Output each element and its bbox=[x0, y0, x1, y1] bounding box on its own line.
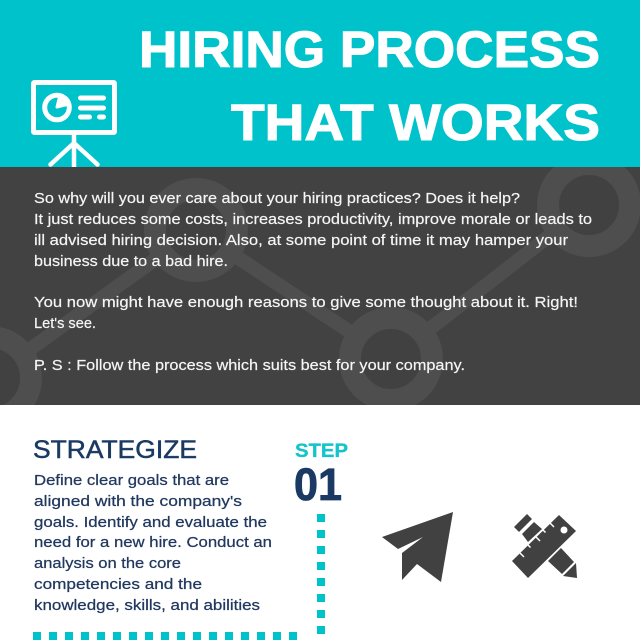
icon: ruler and pencil bbox=[512, 514, 577, 578]
strategize description: goals. Identify and evaluate the bbox=[34, 514, 267, 531]
dotted horizontal connector bbox=[33, 632, 297, 640]
panel: introduction bbox=[0, 164, 640, 419]
introduction text: So why will you ever care about your hiring practices? Does it help? bbox=[34, 190, 520, 207]
title bbox=[139, 21, 600, 151]
introduction text: Let's see. bbox=[34, 315, 96, 332]
strategize description: aligned with the company's bbox=[34, 493, 242, 510]
panel: title header bbox=[0, 0, 640, 167]
strategize description: need for a new hire. Conduct an bbox=[34, 534, 272, 551]
title: HIRING PROCESS bbox=[139, 21, 600, 78]
strategize description bbox=[34, 472, 272, 614]
icon: paper plane bbox=[382, 512, 453, 582]
strategize description: knowledge, skills, and abilities bbox=[34, 597, 260, 614]
dotted vertical connector bbox=[317, 514, 325, 634]
step label: STEP bbox=[295, 440, 348, 462]
introduction text: P. S : Follow the process which suits best for your company. bbox=[34, 357, 465, 374]
decorative network graphic bbox=[0, 164, 630, 419]
introduction text: It just reduces some costs, increases productivity, improve morale or leads to bbox=[34, 211, 592, 228]
step number: 01 bbox=[294, 459, 342, 510]
introduction text bbox=[34, 190, 592, 374]
introduction text: business due to a bad hire. bbox=[34, 253, 228, 270]
introduction text: ill advised hiring decision. Also, at some point of time it may hamper your bbox=[34, 232, 568, 249]
strategize description: analysis on the core bbox=[34, 555, 181, 572]
strategize description: competencies and the bbox=[34, 576, 202, 593]
title: THAT WORKS bbox=[231, 94, 600, 151]
introduction text: You now might have enough reasons to give some thought about it. Right! bbox=[34, 294, 578, 311]
strategize description: Define clear goals that are bbox=[34, 472, 229, 489]
icon: presentation board bbox=[34, 82, 114, 167]
heading: strategize: STRATEGIZE bbox=[33, 436, 197, 464]
